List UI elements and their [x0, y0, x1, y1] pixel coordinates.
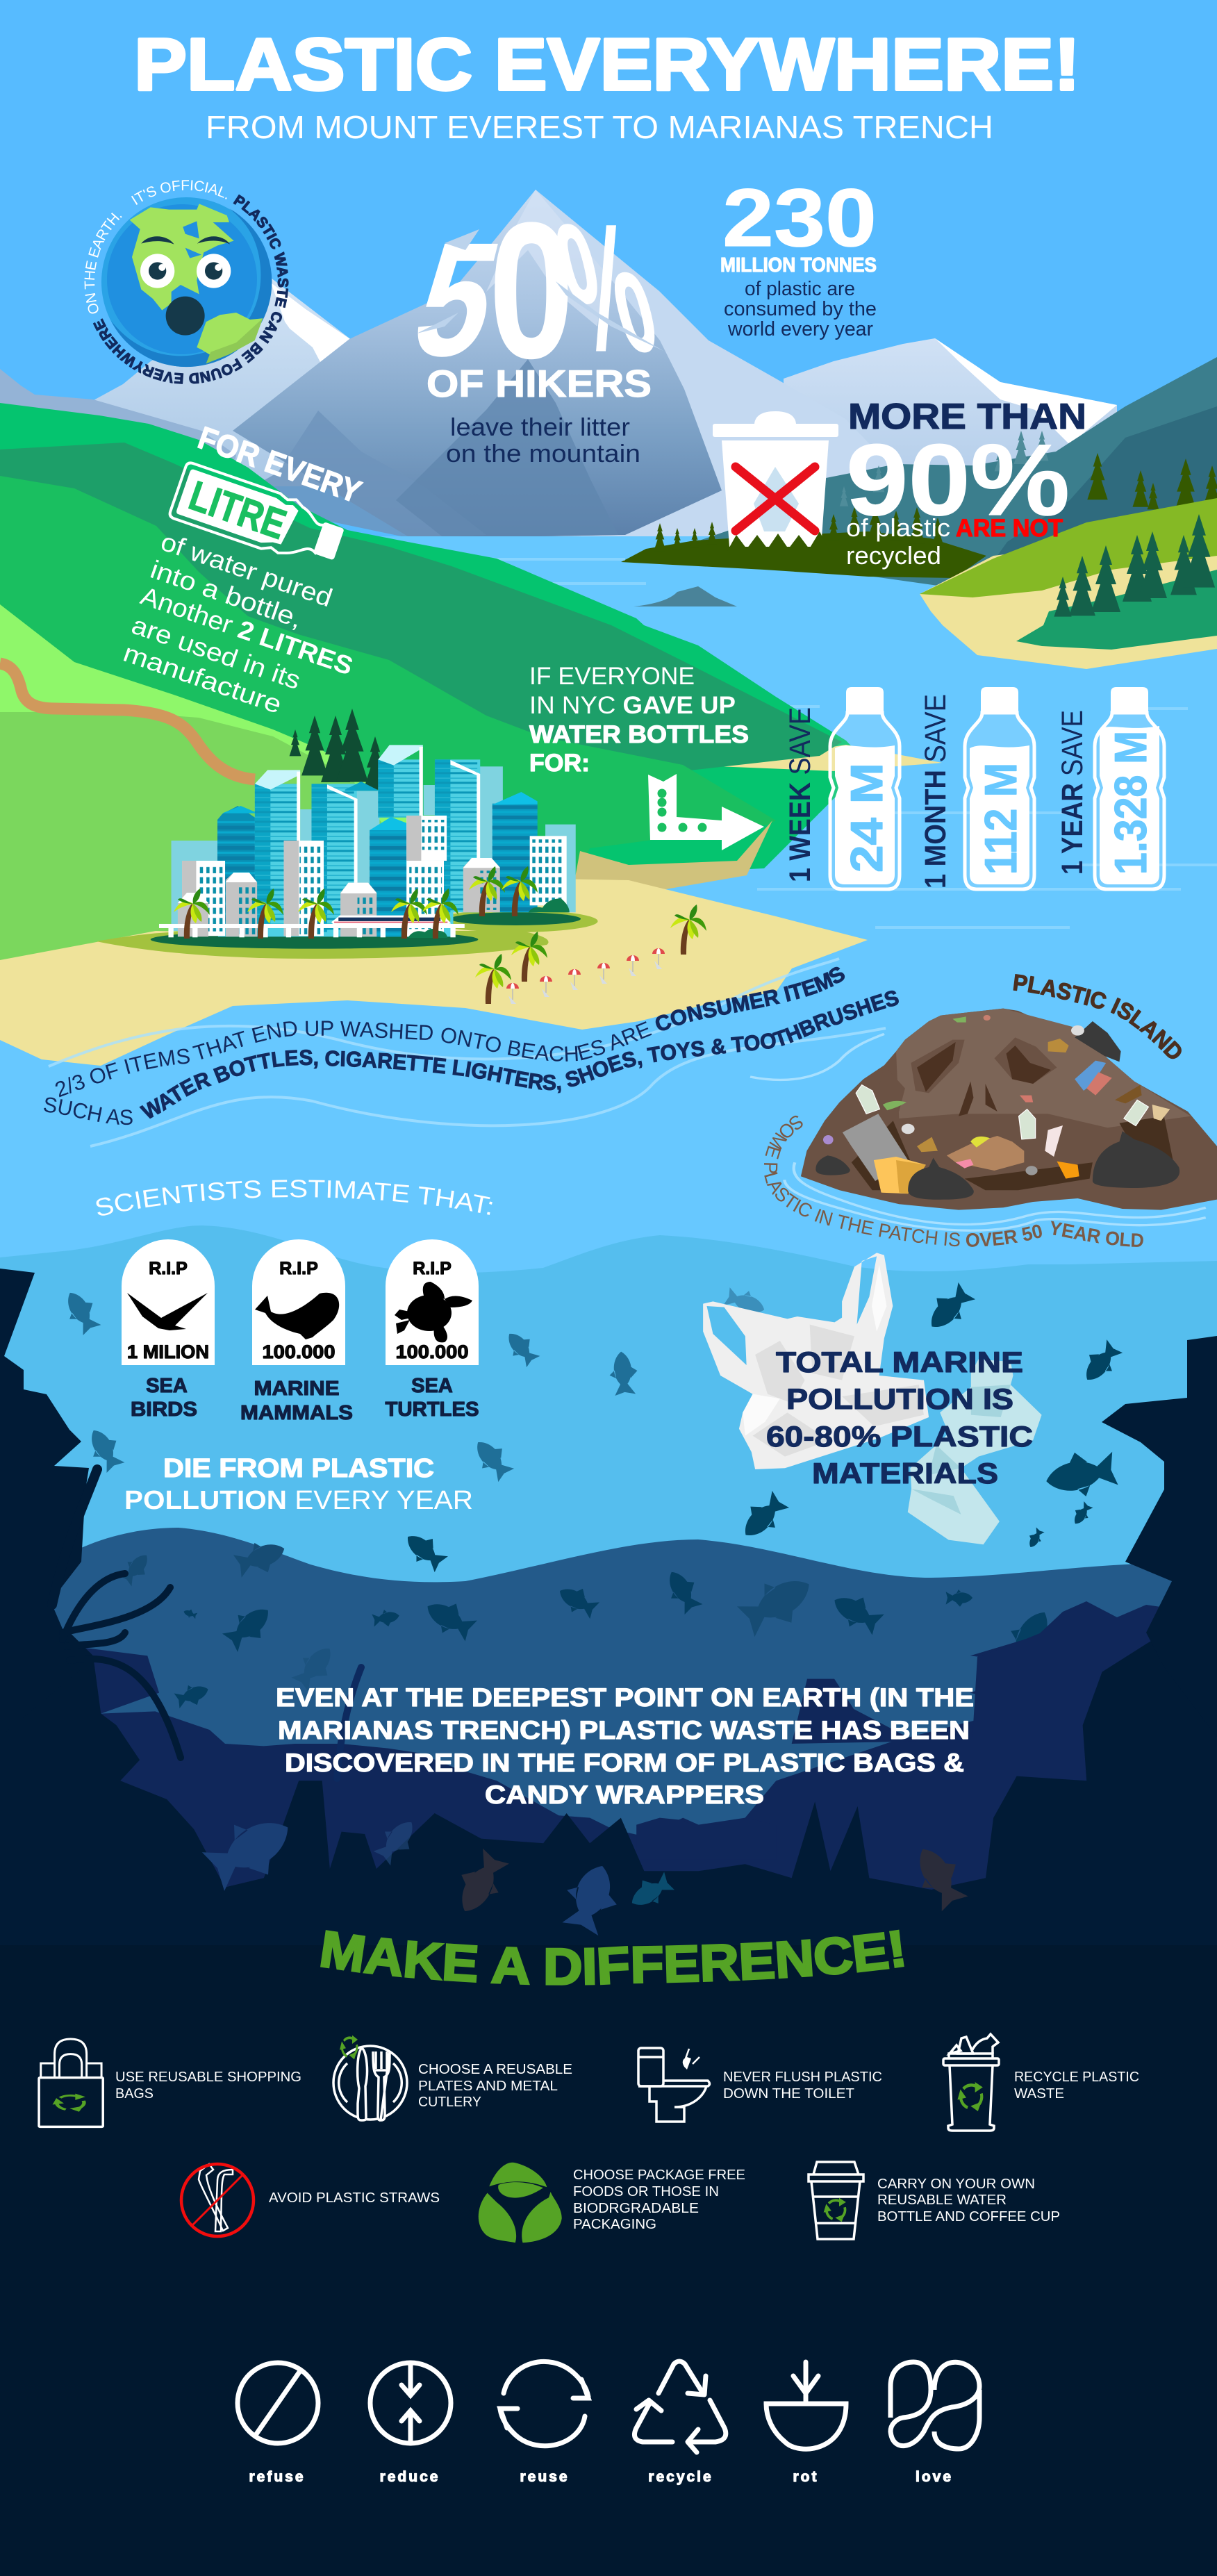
plastic island	[750, 1009, 1217, 1230]
litre fact text: manufacture	[119, 638, 285, 719]
tip text: cup: BOTTLE AND COFFEE CUP	[877, 2208, 1060, 2224]
230 million tonnes stat: world every year	[727, 318, 873, 340]
icon: leaves	[479, 2163, 562, 2243]
icon: recycling bin	[943, 2034, 999, 2131]
tombstone: sea birds	[122, 1239, 215, 1365]
tip text: packaging: PACKAGING	[573, 2216, 656, 2232]
for every heading: FOR EVERY	[194, 419, 366, 510]
R labels: reuse	[520, 2469, 570, 2485]
90 percent stat: ARE NOT	[956, 515, 1063, 542]
forest peninsula	[621, 453, 1217, 578]
icon: plate and cutlery	[333, 2036, 407, 2120]
bottle: 24 M	[830, 687, 900, 889]
left hills	[0, 403, 942, 986]
deep sea text: EVEN AT THE DEEPEST POINT ON EARTH (IN THE	[276, 1683, 974, 1712]
city skyline	[96, 745, 598, 959]
NYC text	[529, 663, 749, 777]
tip text: recycling: RECYCLE PLASTIC	[1014, 2069, 1139, 2085]
sky background	[0, 0, 1217, 695]
hikers caption: leave their litter	[450, 413, 630, 441]
species labels: BIRDS	[131, 1398, 197, 1421]
dark reef silhouette	[0, 1269, 1217, 1957]
curved earth caption: ON THE EARTH.	[85, 213, 122, 314]
tip text: recycling: WASTE	[1014, 2086, 1064, 2102]
R labels: reduce	[380, 2469, 440, 2485]
tip text: cup: CARRY ON YOUR OWN	[877, 2176, 1035, 2192]
icon: litre bottle: LITRE	[183, 472, 292, 548]
icon: toilet	[638, 2048, 710, 2122]
NYC text: WATER BOTTLES	[529, 721, 749, 748]
tip text: cutlery	[418, 2061, 572, 2110]
navy coral layer	[0, 1601, 1217, 1957]
save labels	[784, 694, 1089, 889]
tombstone: sea turtles: 100.000	[396, 1341, 468, 1362]
bottle: 112 M	[965, 687, 1034, 889]
tombstone: marine mammals: 100.000	[263, 1341, 335, 1362]
tip text: packaging: FOODS OR THOSE IN	[573, 2183, 719, 2199]
plastic patch caption: SOME PLASTIC IN THE PATCH IS OVER 50 YEAR OLD	[764, 1116, 1143, 1247]
icon: no straws	[181, 2164, 254, 2236]
species labels: SEA	[146, 1375, 188, 1397]
shoreline ripples	[49, 959, 886, 1146]
icon: reuse	[500, 2361, 588, 2446]
NYC text: IF EVERYONE	[529, 663, 695, 690]
50 percent figure	[399, 182, 672, 398]
litre fact text	[119, 527, 356, 719]
bottle: 112 M: 112 M	[975, 763, 1026, 875]
right shore hills	[920, 498, 1217, 669]
tip text: shopping bags: USE REUSABLE SHOPPING	[115, 2069, 301, 2085]
scientists heading: SCIENTISTS ESTIMATE THAT:	[96, 1180, 492, 1216]
save labels: 1 YEAR SAVE	[1056, 710, 1089, 875]
tip text: toilet: DOWN THE TOILET	[723, 2086, 854, 2102]
fish in mid water	[58, 1280, 1125, 1575]
curved earth caption: IT'S OFFICIAL.	[131, 180, 227, 205]
90 percent stat: MORE THAN	[848, 397, 1086, 437]
icon: love	[891, 2362, 979, 2449]
tip text: straws: AVOID PLASTIC STRAWS	[269, 2190, 440, 2206]
marine pollution text	[766, 1346, 1033, 1489]
tip text: shopping bags	[115, 2069, 301, 2102]
R labels: rot	[793, 2469, 818, 2485]
water ripple lines	[479, 559, 1217, 927]
litre fact text: of water pured	[157, 527, 336, 613]
save labels: 1 WEEK SAVE	[784, 707, 817, 882]
230 million tonnes stat	[720, 172, 877, 340]
bottle: 1.328 M: 1.328 M	[1105, 731, 1156, 875]
tombstone: sea turtles: R.I.P	[413, 1259, 452, 1278]
icon: coffee cup	[809, 2162, 863, 2239]
deep sea text: CANDY WRAPPERS	[485, 1781, 764, 1809]
marine pollution text: POLLUTION IS	[786, 1382, 1013, 1415]
plastic bag	[703, 1253, 929, 1469]
hikers caption: on the mountain	[446, 439, 640, 468]
tip text: shopping bags: BAGS	[115, 2086, 154, 2102]
lake water	[0, 536, 1217, 1301]
title: PLASTIC EVERYWHERE!	[134, 24, 1080, 106]
230 million tonnes stat: consumed by the	[724, 298, 877, 320]
NYC text: IN NYC GAVE UP	[529, 692, 736, 719]
tip text: cutlery: CHOOSE A REUSABLE	[418, 2061, 572, 2077]
hikers caption	[446, 413, 640, 468]
main beach sand	[0, 879, 868, 1066]
tombstone: marine mammals	[252, 1239, 345, 1365]
palm trees	[174, 866, 706, 1004]
subtitle: FROM MOUNT EVEREST TO MARIANAS TRENCH	[206, 109, 993, 145]
litre fact text: Another 2 LITRES	[137, 581, 356, 681]
earth mascot	[101, 197, 272, 367]
of hikers label: OF HIKERS	[427, 362, 652, 405]
230 million tonnes stat: of plastic are	[745, 278, 855, 300]
50 percent figure: 5	[399, 209, 515, 389]
tombstone: marine mammals: R.I.P	[279, 1259, 318, 1278]
make a difference heading: MAKE A DIFFERENCE!	[320, 1930, 904, 1985]
R labels	[249, 2469, 953, 2485]
icon: crossed trash can	[713, 411, 838, 552]
bottle: 24 M: 24 M	[841, 763, 892, 873]
ocean layer	[0, 1225, 1217, 1667]
litre fact text: into a bottle,	[147, 555, 306, 634]
230 million tonnes stat: 230	[722, 172, 877, 264]
litre fact text: are used in its	[128, 611, 304, 695]
deep sea text: DISCOVERED IN THE FORM OF PLASTIC BAGS &	[285, 1749, 964, 1777]
species labels: SEA	[411, 1375, 453, 1397]
bottle: 1.328 M	[1095, 687, 1164, 889]
deep water layer	[0, 1528, 1217, 1945]
tombstone: sea birds: R.I.P	[149, 1259, 188, 1278]
tip text: packaging	[573, 2167, 745, 2232]
230 million tonnes stat: MILLION TONNES	[720, 254, 877, 276]
beach text line 1: 2/3 OF ITEMS THAT END UP WASHED ONTO BEACHES ARE CONSUMER ITEMS	[56, 967, 845, 1098]
bottom background	[0, 1945, 1217, 2576]
50 percent figure: 0	[489, 182, 574, 398]
species labels: TURTLES	[385, 1398, 479, 1421]
die from plastic text	[124, 1454, 473, 1515]
icon: shopping bag	[39, 2039, 103, 2127]
90 percent stat	[846, 397, 1086, 570]
crushed water bottle	[908, 1360, 1042, 1544]
icon: reduce	[370, 2363, 451, 2443]
tip text: toilet: NEVER FLUSH PLASTIC	[723, 2069, 882, 2085]
seaweed	[52, 1469, 361, 1778]
marine pollution text: TOTAL MARINE	[776, 1346, 1023, 1378]
icon: refuse	[238, 2363, 318, 2443]
marine pollution text: MATERIALS	[812, 1457, 998, 1489]
beach text line 2: SUCH AS WATER BOTTLES, CIGARETTE LIGHTERS, SHOES, TOYS & TOOTHBRUSHES	[44, 991, 899, 1125]
50 percent figure: %	[540, 187, 672, 390]
icon: litre bottle	[169, 461, 349, 572]
small rock island	[634, 586, 737, 606]
die from plastic text: DIE FROM PLASTIC	[163, 1454, 434, 1483]
beach umbrellas	[506, 948, 665, 1004]
NYC text: FOR:	[529, 750, 590, 777]
teal hills	[675, 357, 1217, 591]
deep sea text: MARIANAS TRENCH) PLASTIC WASTE HAS BEEN	[278, 1716, 970, 1744]
tombstone: sea birds: 1 MILION	[127, 1341, 209, 1362]
plastic island heading: PLASTIC ISLAND	[1013, 974, 1182, 1059]
curved earth caption: PLASTIC WASTE CAN BE FOUND EVERYWHERE	[93, 195, 289, 384]
species labels	[131, 1375, 479, 1424]
die from plastic text: POLLUTION EVERY YEAR	[124, 1486, 473, 1515]
marine pollution text: 60-80% PLASTIC	[766, 1420, 1033, 1453]
tip text: cup: REUSABLE WATER	[877, 2192, 1007, 2208]
icon: recycle	[634, 2361, 726, 2452]
save labels: 1 MONTH SAVE	[919, 694, 952, 889]
dark fish silhouettes	[198, 1802, 972, 1938]
tip text: toilet	[723, 2069, 882, 2102]
tip text: packaging: BIODRGRADABLE	[573, 2200, 699, 2216]
deep sea text	[276, 1683, 974, 1809]
R labels: recycle	[648, 2469, 713, 2485]
species labels: MAMMALS	[240, 1402, 353, 1424]
tip text: recycling	[1014, 2069, 1139, 2102]
tip text: packaging: CHOOSE PACKAGE FREE	[573, 2167, 745, 2183]
icon: rot	[766, 2362, 846, 2449]
tip text: cutlery: PLATES AND METAL	[418, 2078, 558, 2094]
90 percent stat: 90%	[846, 423, 1070, 536]
mountain shading across figure	[417, 229, 663, 351]
R labels: love	[916, 2469, 953, 2485]
90 percent stat: of plastic	[846, 513, 950, 542]
90 percent stat: recycled	[846, 541, 941, 570]
R labels: refuse	[249, 2469, 306, 2485]
tip text: cup	[877, 2176, 1060, 2224]
tombstone: sea turtles	[386, 1239, 479, 1365]
tip text: cutlery: CUTLERY	[418, 2094, 481, 2110]
species labels: MARINE	[254, 1378, 339, 1400]
arrow	[648, 774, 764, 850]
mountains	[0, 190, 1117, 556]
fish in deep water	[117, 1534, 1063, 1792]
